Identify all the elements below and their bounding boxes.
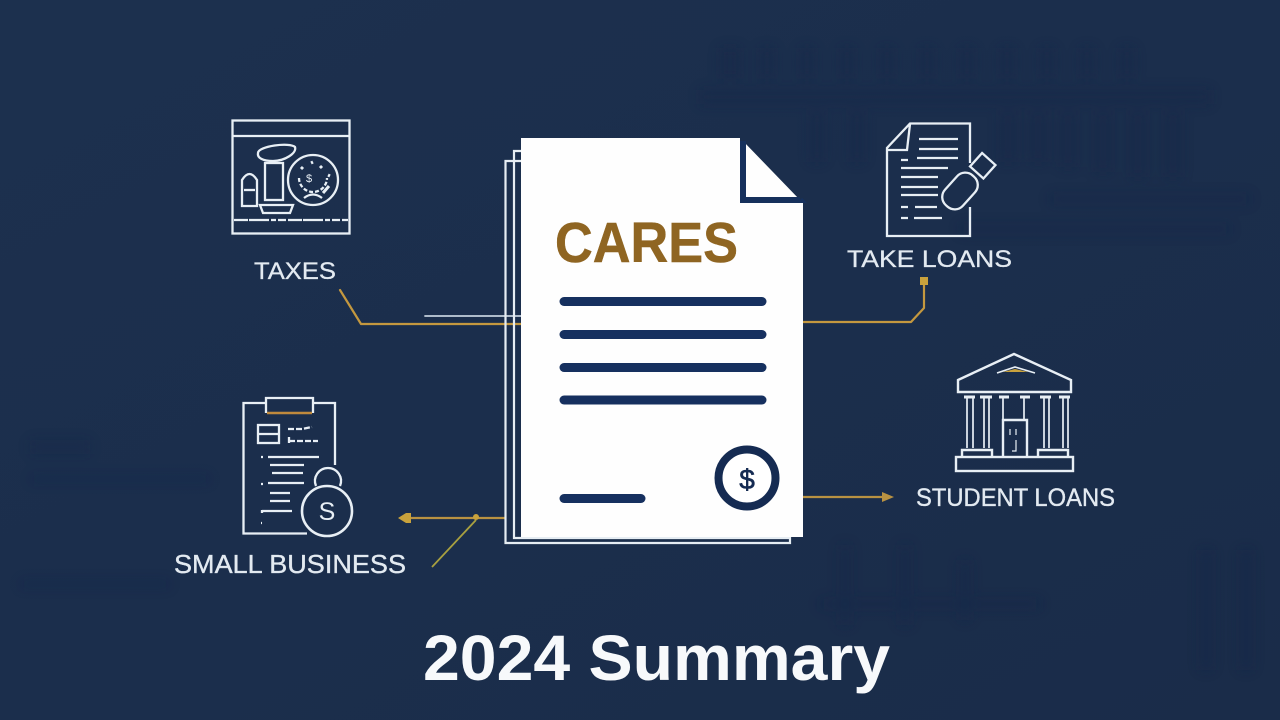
connector: student loans: [803, 492, 894, 502]
document text lines: [564, 302, 762, 498]
label: student loans: STUDENT LOANS: [916, 484, 1115, 512]
label: take loans: TAKE LOANS: [847, 246, 1012, 273]
connector: taxes: [340, 290, 521, 324]
label: small business: SMALL BUSINESS: [174, 549, 406, 579]
CARES heading: CARES: [555, 211, 738, 275]
back sheets: [506, 151, 790, 543]
page fold: [743, 141, 800, 200]
dollar seal: $: [739, 464, 755, 495]
connector: take loans: [803, 277, 928, 322]
title: 2024 Summary: [423, 622, 890, 694]
icon: small business clipboard with money lock: S: [319, 498, 335, 526]
front page: [521, 138, 803, 537]
icon: take loans document with pen: [887, 124, 998, 236]
central document: [506, 138, 803, 543]
icon: small business clipboard with money lock: [244, 398, 352, 536]
icon: taxes: [232, 120, 350, 234]
connector: small business: [398, 513, 505, 567]
icon: student loans bank: [956, 354, 1073, 471]
label: taxes: TAXES: [254, 258, 336, 285]
icon: taxes: $: [306, 173, 312, 185]
dollar seal: [718, 450, 776, 506]
